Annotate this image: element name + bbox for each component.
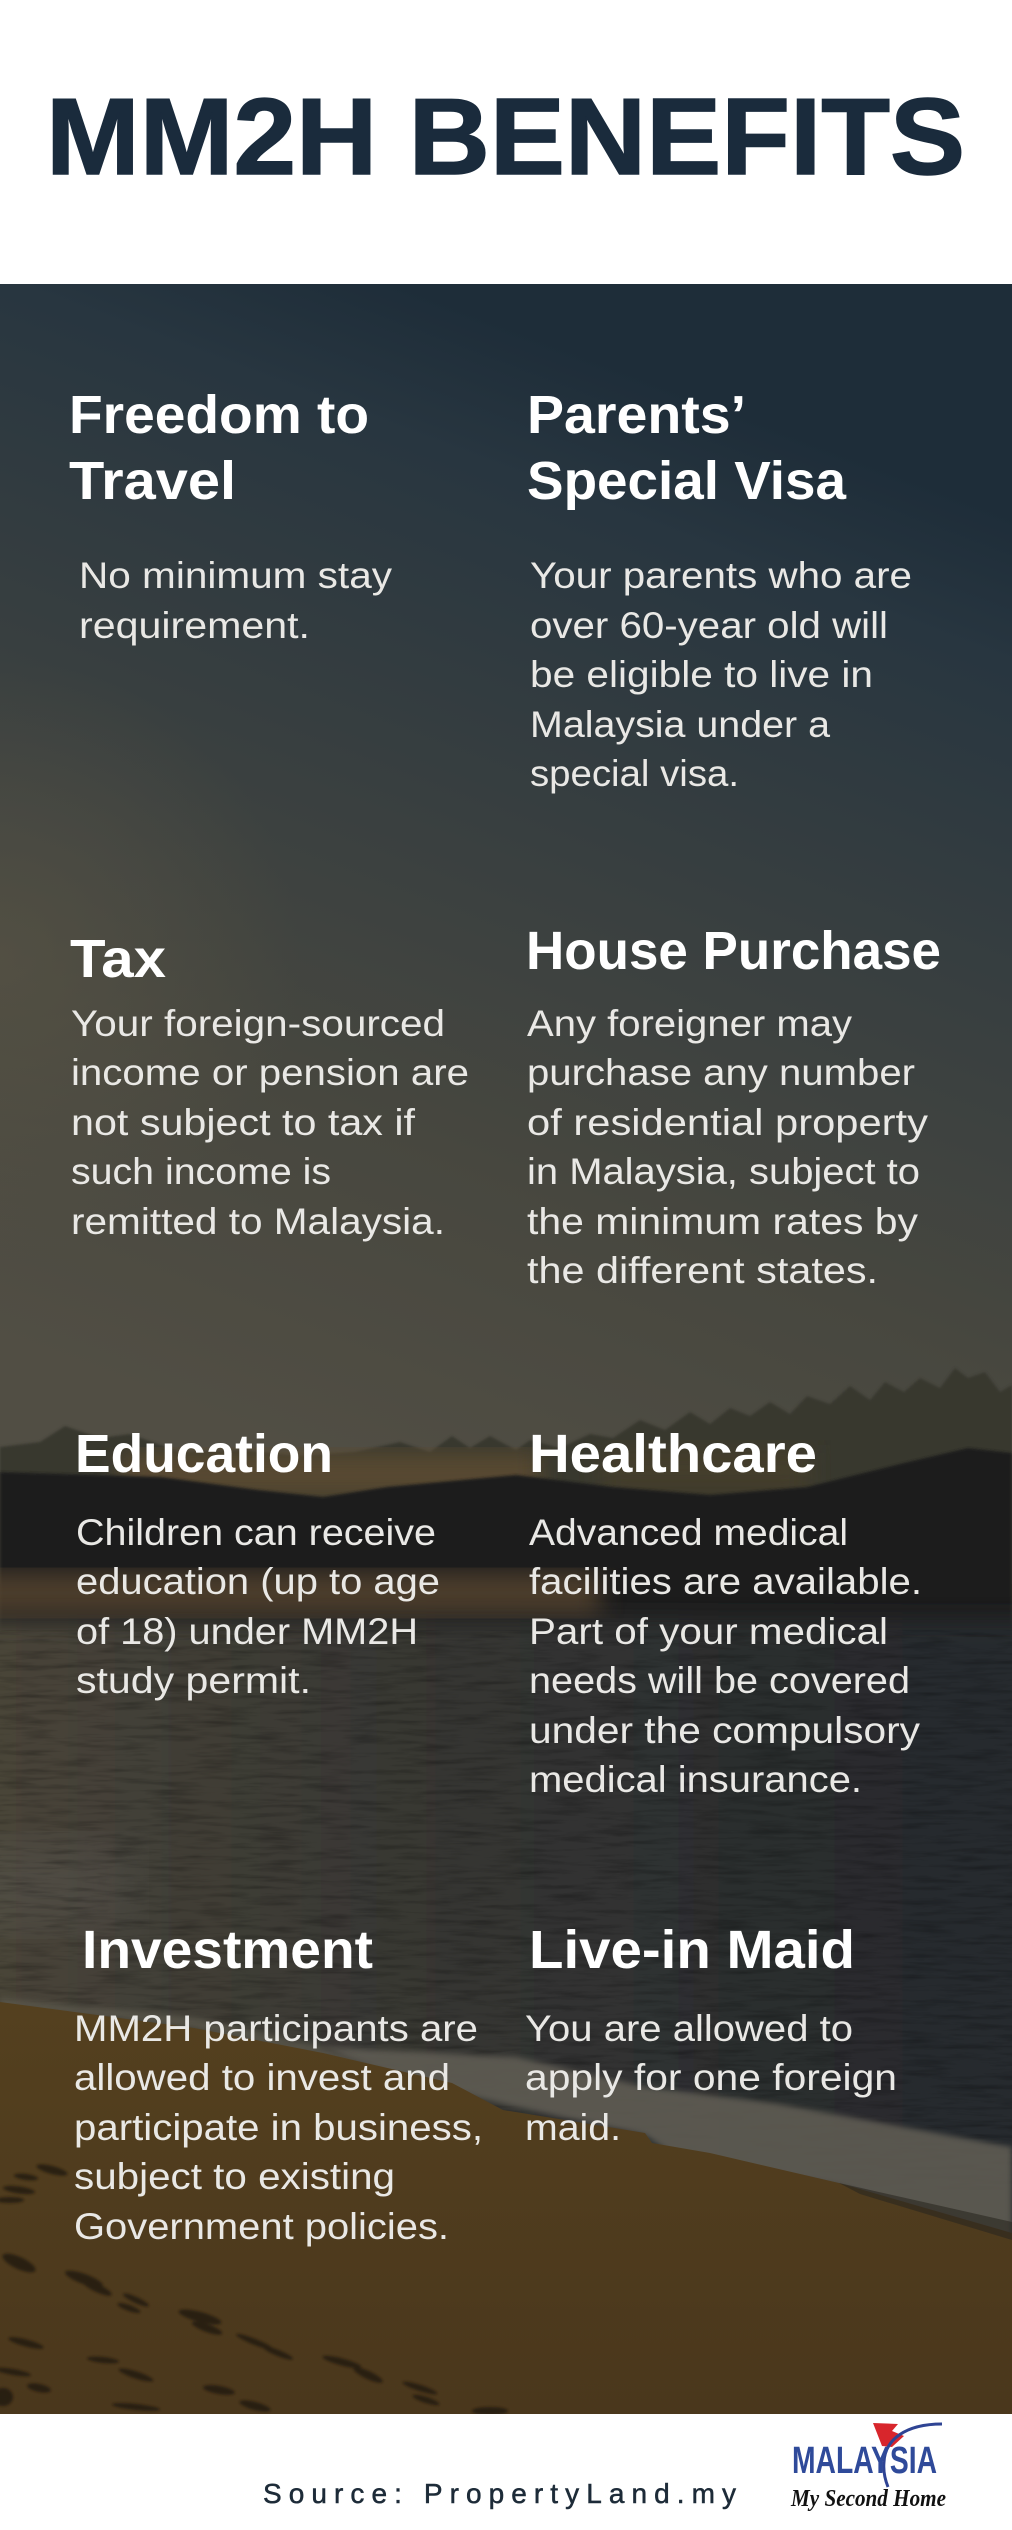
- text: Freedom to Travel description: requirement.: [79, 605, 310, 646]
- text: House Purchase description: Any foreigner may: [527, 1003, 853, 1044]
- text: Live-in Maid description: apply for one foreign: [525, 2057, 897, 2098]
- text: Education description: of 18) under MM2H: [76, 1611, 418, 1652]
- text: Healthcare description: Part of your medical: [529, 1611, 888, 1652]
- text: Parents' Special Visa description: [530, 555, 912, 794]
- text: Parents' Special Visa description: Malaysia under a: [530, 704, 830, 745]
- panel: Tax: [70, 929, 469, 1242]
- panel: House Purchase: [526, 921, 941, 1291]
- text: Investment description: Government policies.: [74, 2206, 449, 2247]
- text: Education description: Children can receive: [76, 1512, 436, 1553]
- text: Healthcare description: medical insurance.: [529, 1759, 862, 1800]
- panel: Investment: [74, 1920, 483, 2247]
- panel: Healthcare: [529, 1424, 922, 1800]
- text: Investment description: [74, 2008, 483, 2247]
- text: Education description: study permit.: [76, 1660, 311, 1701]
- text: Healthcare description: facilities are available.: [529, 1561, 922, 1602]
- logo tagline: My Second Home: [790, 2486, 946, 2512]
- panel: Live-in Maid: [525, 1920, 897, 2148]
- text: Live-in Maid description: maid.: [525, 2107, 621, 2148]
- text: Education description: [76, 1512, 440, 1701]
- heading: Freedom to Travel: [69, 385, 369, 511]
- heading: Freedom to Travel: Travel: [69, 451, 236, 511]
- heading: Education: Education: [75, 1424, 333, 1484]
- text: Tax description: [71, 1003, 469, 1242]
- heading: Live-in Maid: Live-in Maid: [529, 1920, 855, 1980]
- heading: House Purchase: House Purchase: [526, 921, 941, 981]
- text: Investment description: allowed to invest and: [74, 2057, 450, 2098]
- heading: Healthcare: Healthcare: [529, 1424, 817, 1484]
- text: Tax description: not subject to tax if: [71, 1102, 416, 1143]
- text: Healthcare description: Advanced medical: [529, 1512, 848, 1553]
- text: Tax description: income or pension are: [71, 1052, 469, 1093]
- text: Investment description: subject to existing: [74, 2156, 395, 2197]
- footprints: [0, 2162, 508, 2415]
- text: House Purchase description: the different states.: [527, 1250, 878, 1291]
- text: Parents' Special Visa description: over 60-year old will: [530, 605, 888, 646]
- icon: blue arc: [884, 2424, 942, 2487]
- heading: Investment: Investment: [82, 1920, 373, 1980]
- text: Live-in Maid description: You are allowed to: [525, 2008, 853, 2049]
- text: House Purchase description: in Malaysia, subject to: [527, 1151, 920, 1192]
- icon: red hibiscus petal: [873, 2423, 904, 2447]
- text: Parents' Special Visa description: special visa.: [530, 753, 739, 794]
- text: Investment description: MM2H participants are: [74, 2008, 478, 2049]
- text: House Purchase description: the minimum rates by: [527, 1201, 919, 1242]
- text: Healthcare description: [529, 1512, 922, 1800]
- heading: Parents' Special Visa: [527, 385, 847, 511]
- text: Tax description: Your foreign-sourced: [71, 1003, 445, 1044]
- text: Parents' Special Visa description: Your parents who are: [530, 555, 912, 596]
- title: MM2H BENEFITS: [46, 76, 965, 198]
- heading: Parents' Special Visa: Special Visa: [527, 451, 847, 511]
- text: Healthcare description: under the compulsory: [529, 1710, 921, 1751]
- text: Healthcare description: needs will be covered: [529, 1660, 910, 1701]
- source credit: Source: PropertyLand.my: [263, 2478, 736, 2509]
- panel: Freedom to Travel: [69, 385, 393, 646]
- text: House Purchase description: of residential property: [527, 1102, 929, 1143]
- text: Investment description: participate in business,: [74, 2107, 483, 2148]
- panel: Education: [75, 1424, 440, 1701]
- logo: Malaysia My Second Home: [790, 2423, 946, 2512]
- panel: Parents' Special Visa: [527, 385, 912, 794]
- text: Tax description: such income is: [71, 1151, 331, 1192]
- heading: Parents' Special Visa: Parents’: [527, 385, 746, 445]
- text: Tax description: remitted to Malaysia.: [71, 1201, 445, 1242]
- text: Live-in Maid description: [525, 2008, 897, 2148]
- heading: Freedom to Travel: Freedom to: [69, 385, 369, 445]
- text: House Purchase description: [527, 1003, 929, 1291]
- text: Freedom to Travel description: [79, 555, 393, 646]
- text: Parents' Special Visa description: be eligible to live in: [530, 654, 873, 695]
- heading: Tax: Tax: [70, 929, 166, 989]
- text: Education description: education (up to age: [76, 1561, 440, 1602]
- text: Freedom to Travel description: No minimum stay: [79, 555, 393, 596]
- logo wordmark: MALAYSIA: [792, 2440, 937, 2482]
- text: House Purchase description: purchase any number: [527, 1052, 915, 1093]
